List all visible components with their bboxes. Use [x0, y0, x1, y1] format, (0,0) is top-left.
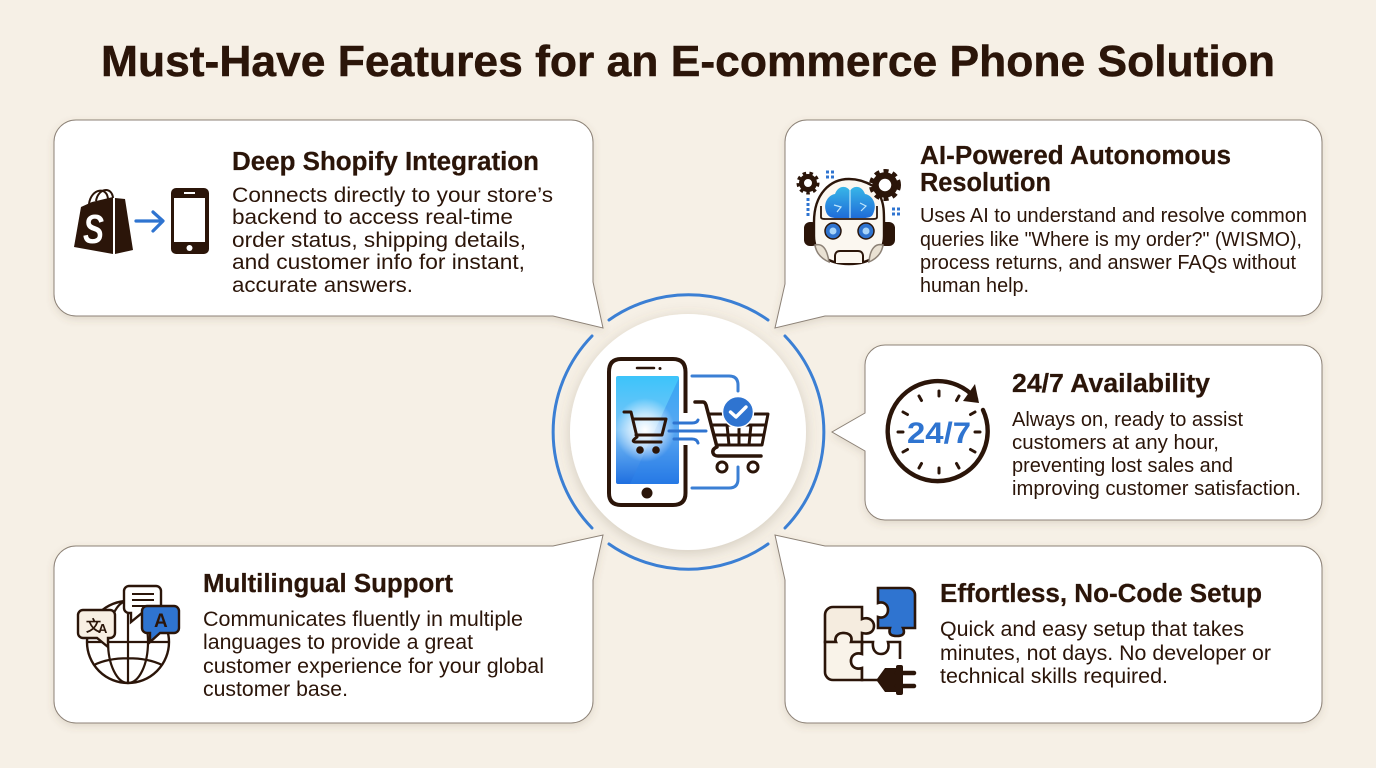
panel: Multilingual Support: [54, 535, 603, 723]
body text: customers at any hour,: [1012, 432, 1219, 454]
heading: 24/7 Availability: [1012, 370, 1211, 398]
central hub: [553, 295, 824, 569]
icon: globe with translation bubbles: [78, 586, 179, 683]
icon: 24/7 clock: 24/7: [907, 417, 971, 450]
body text: accurate answers.: [232, 274, 413, 297]
heading: [920, 142, 1231, 197]
body text: customer experience for your global: [203, 655, 544, 678]
title: Must-Have Features for an E-commerce Phone Solution: [101, 37, 1275, 86]
panel: 24/7 Availability: [832, 345, 1322, 520]
body text: and customer info for instant,: [232, 251, 525, 274]
body text: [203, 608, 544, 701]
icon: Shopify bag to phone: S: [83, 206, 104, 252]
panel: Deep Shopify Integration: [54, 120, 603, 328]
heading: AI-Powered Autonomous: [920, 142, 1231, 170]
icon: globe with translation bubbles: 文: [86, 617, 102, 635]
body text: customer base.: [203, 678, 348, 701]
body text: languages to provide a great: [203, 631, 473, 654]
body text: Connects directly to your store’s: [232, 184, 553, 207]
icon: AI robot with brain and gears: [798, 171, 900, 264]
icon: puzzle pieces and plug: [825, 588, 915, 695]
white circle: [570, 314, 806, 550]
body text: Communicates fluently in multiple: [203, 608, 523, 631]
body text: queries like "Where is my order?" (WISMO),: [920, 229, 1302, 251]
heading: Effortless, No-Code Setup: [940, 580, 1262, 608]
icon: phone and shopping cart: [609, 359, 768, 505]
body text: Always on, ready to assist: [1012, 409, 1243, 431]
heading: Deep Shopify Integration: [232, 148, 539, 176]
body text: backend to access real-time: [232, 206, 513, 229]
body text: minutes, not days. No developer or: [940, 642, 1271, 665]
body text: technical skills required.: [940, 665, 1168, 688]
body text: Uses AI to understand and resolve common: [920, 205, 1307, 227]
body text: order status, shipping details,: [232, 229, 526, 252]
body text: [920, 205, 1307, 297]
body text: improving customer satisfaction.: [1012, 478, 1301, 500]
icon: Shopify bag to phone: [74, 188, 209, 254]
body text: [232, 184, 553, 297]
body text: [1012, 409, 1301, 500]
panel: AI-Powered Autonomous Resolution: [775, 120, 1322, 328]
body text: process returns, and answer FAQs without: [920, 252, 1296, 274]
heading: Multilingual Support: [203, 570, 454, 598]
body text: preventing lost sales and: [1012, 455, 1233, 477]
panel: Effortless, No-Code Setup: [775, 535, 1322, 723]
icon: globe with translation bubbles: A: [98, 621, 108, 636]
body text: [940, 618, 1271, 688]
icon: globe with translation bubbles: A: [154, 611, 168, 632]
body text: human help.: [920, 275, 1029, 297]
heading: Resolution: [920, 169, 1051, 197]
body text: Quick and easy setup that takes: [940, 618, 1244, 641]
icon: 24/7 clock: [888, 381, 988, 481]
ring segments: [553, 295, 824, 569]
